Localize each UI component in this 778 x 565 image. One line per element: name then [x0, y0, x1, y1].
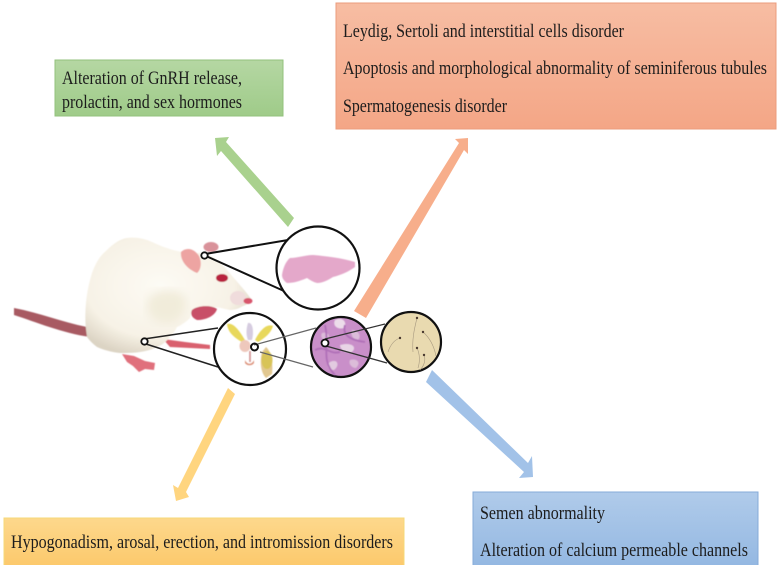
magnifier lines: seminiferous tubules	[254, 328, 316, 367]
text: sexual function disorders: Hypogonadism, arosal, erection, and intromission disorders	[11, 532, 393, 553]
text: hormones: prolactin, and sex hormones	[62, 92, 242, 113]
panel: testicular tissue (orange)	[336, 3, 776, 129]
arrow: green	[215, 137, 294, 227]
magnifier: brain	[276, 226, 360, 310]
rat tail	[14, 308, 90, 337]
rat front leg	[163, 339, 210, 349]
arrow: blue	[426, 370, 533, 478]
text: testicular disorders: Spermatogenesis disorder	[343, 96, 508, 117]
rat fur shading	[147, 290, 187, 324]
marker: reproductive tract	[251, 344, 258, 350]
rat whisker pad	[230, 291, 246, 305]
arrow: orange	[354, 138, 468, 318]
panel: sexual function (yellow)	[4, 518, 404, 565]
rat far ear	[204, 242, 218, 252]
magnifier lines: reproductive tract	[144, 328, 218, 367]
text: testicular disorders	[343, 21, 767, 117]
magnifier lines: sperm	[325, 324, 387, 363]
arrow: yellow	[173, 388, 235, 501]
sperm heads	[399, 317, 425, 356]
text: hormones	[62, 68, 242, 113]
text: semen abnormalities: Semen abnormality	[480, 503, 605, 524]
brain section	[282, 255, 355, 283]
reproductive organs	[227, 323, 273, 378]
text: semen abnormalities	[480, 503, 748, 561]
magnifier: reproductive tract	[214, 313, 286, 385]
rat body	[85, 238, 252, 353]
rat nose	[244, 298, 252, 304]
marker: reproductive tract origin	[141, 338, 148, 345]
text: hormones: Alteration of GnRH release,	[62, 68, 242, 89]
magnifier lines: brain	[205, 240, 288, 291]
illustration: rat	[14, 238, 252, 372]
tissue pattern	[315, 319, 365, 375]
sperm cells	[388, 318, 436, 370]
text: testicular disorders: Leydig, Sertoli and interstitial cells disorder	[343, 21, 625, 42]
panel: semen (blue)	[473, 492, 758, 565]
rat near ear	[181, 249, 201, 273]
rat hind foot	[122, 354, 155, 372]
rat mouth / forepaw	[191, 306, 217, 320]
magnifier: sperm	[381, 312, 441, 372]
panel: hormones (green)	[55, 60, 283, 116]
magnifier: testis histology	[311, 317, 371, 377]
marker: testis histology	[322, 340, 328, 346]
marker: brain	[201, 252, 208, 259]
rat eye	[216, 274, 228, 282]
